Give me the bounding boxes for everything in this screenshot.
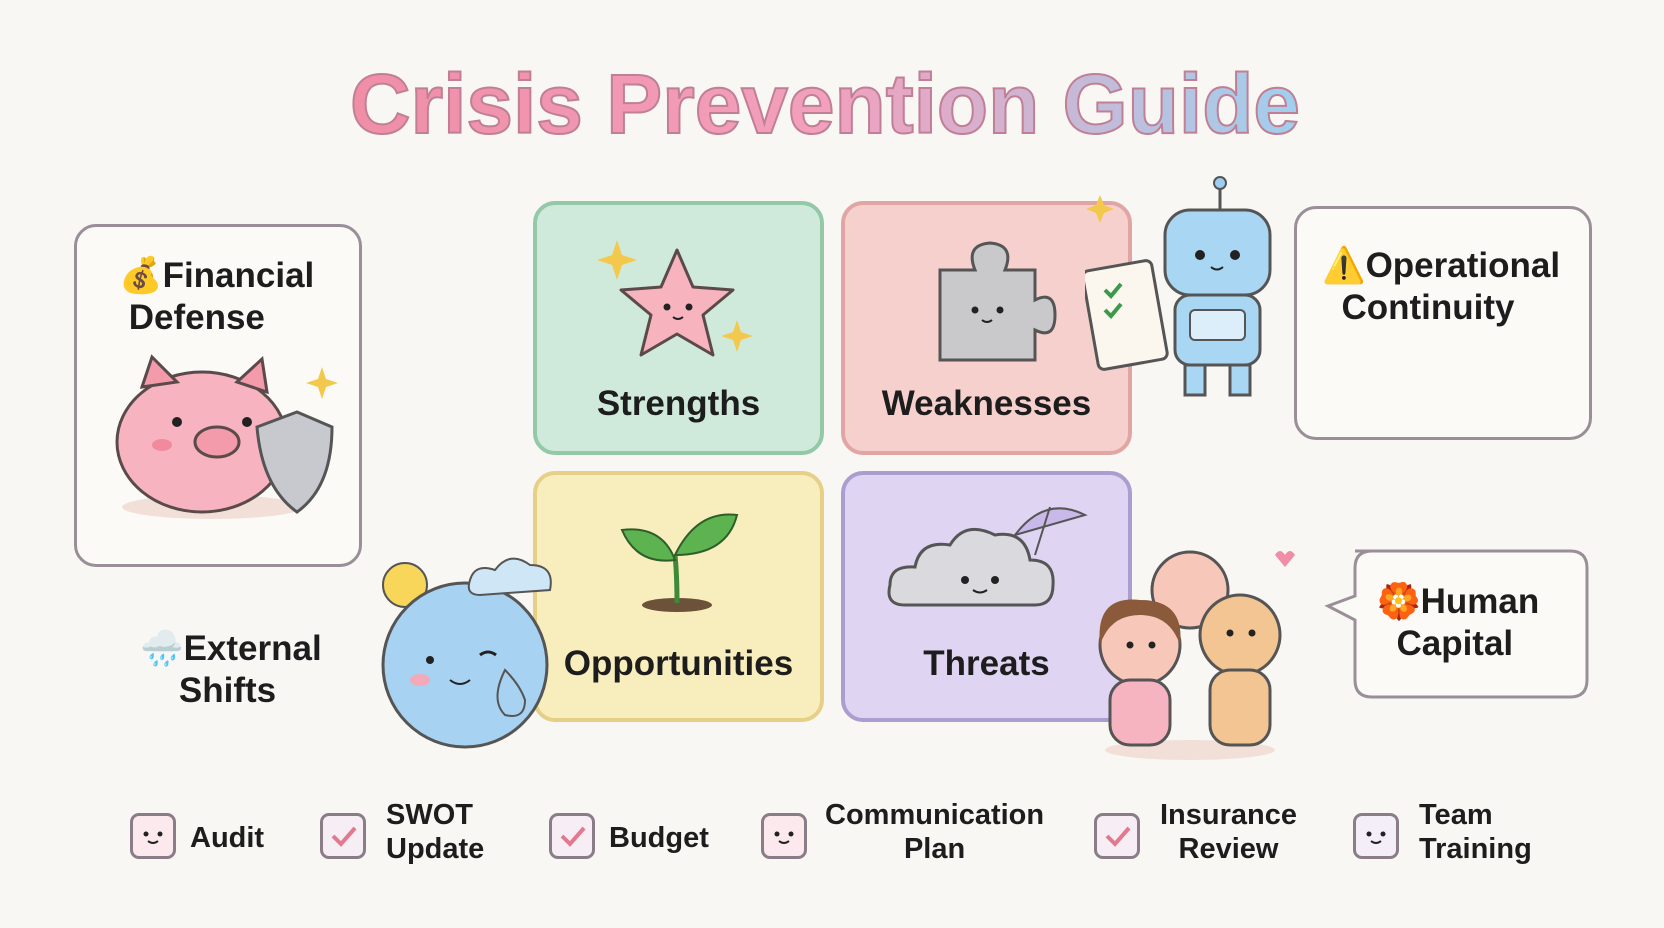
heading: financial defense: 💰Financial [119, 256, 314, 295]
item: insurance review [1094, 799, 1297, 865]
heading: financial defense: Defense [129, 298, 265, 337]
panel: threats [841, 471, 1132, 722]
icon: cloud with umbrella [888, 506, 1088, 606]
heading: human capital: 🏵️Human [1377, 582, 1539, 621]
icon: star [597, 240, 753, 357]
item: team training: Training [1419, 833, 1532, 865]
item: audit [130, 813, 264, 859]
heading: external shifts: Shifts [179, 671, 276, 710]
item: audit: Audit [190, 822, 264, 854]
checklist: bottom action items [130, 799, 1532, 865]
item: communication plan: Plan [904, 833, 965, 865]
heading: external shifts [140, 629, 322, 710]
icon: globe with weather [382, 558, 552, 748]
item: budget: Budget [609, 822, 709, 854]
panel: strengths [533, 201, 824, 455]
icon: sprout [620, 514, 738, 612]
item: swot update [320, 799, 484, 865]
heading: external shifts: 🌧️External [140, 629, 322, 668]
item: communication plan [761, 799, 1044, 865]
item: swot update: Update [386, 833, 484, 865]
label: strengths: Strengths [597, 384, 760, 423]
panel: opportunities [533, 471, 824, 722]
heading: human capital: Capital [1396, 624, 1513, 663]
heading: financial defense [119, 256, 314, 337]
panel: financial defense [74, 224, 362, 567]
panel: weaknesses [841, 201, 1132, 455]
heading: human capital [1377, 582, 1539, 663]
icon: piggy bank with shield [116, 354, 338, 519]
item: budget [549, 813, 709, 859]
item: insurance review: Review [1179, 833, 1278, 865]
title: Crisis Prevention Guide [350, 57, 1300, 150]
label: weaknesses: Weaknesses [882, 384, 1091, 423]
heading: operational continuity [1322, 246, 1560, 327]
item: team training [1353, 799, 1532, 865]
icon: puzzle piece [938, 242, 1056, 362]
item: team training: Team [1419, 799, 1493, 831]
item: insurance review: Insurance [1160, 799, 1297, 831]
label: opportunities: Opportunities [564, 644, 793, 683]
panel: operational continuity [1294, 206, 1592, 440]
heading: operational continuity: ⚠️Operational [1322, 246, 1560, 285]
heading: operational continuity: Continuity [1341, 288, 1514, 327]
icon: robot with checklist [1085, 176, 1272, 396]
panel: human capital speech bubble [1324, 550, 1588, 698]
item: communication plan: Communication [825, 799, 1044, 831]
label: threats: Threats [923, 644, 1050, 683]
icon: people group [1098, 550, 1295, 760]
item: swot update: SWOT [386, 799, 473, 831]
